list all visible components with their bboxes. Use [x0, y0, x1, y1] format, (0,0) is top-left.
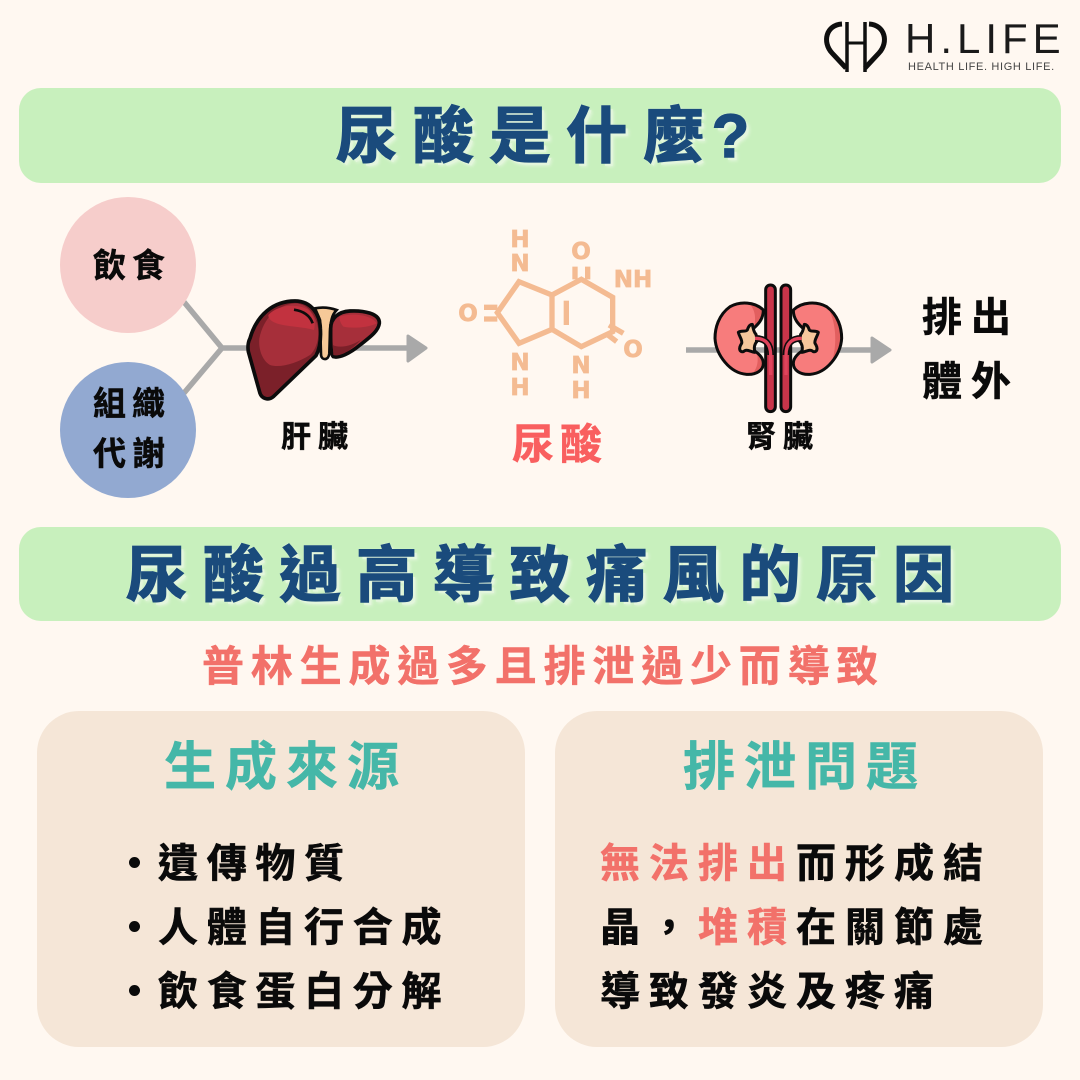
excreted from body text: 排出 體外 — [922, 296, 1020, 404]
circle: tissue metabolism — [60, 362, 196, 498]
panel heading: 排泄問題 — [683, 739, 927, 797]
molecule atom labels: N — [571, 353, 591, 379]
heading text: 尿酸是什麼? — [336, 102, 765, 170]
bullet 3 — [129, 985, 140, 996]
logo wordmark: H.LIFE — [905, 15, 1066, 62]
bullet list — [129, 842, 450, 1014]
bullet 2 — [129, 921, 140, 932]
molecule atom labels: N — [510, 350, 530, 376]
item: body synthesis: 人體自行合成 — [158, 906, 450, 950]
molecule atom labels: H — [510, 375, 530, 401]
explanation text — [600, 842, 992, 1014]
molecule atom labels: H — [510, 227, 530, 253]
molecule atom labels: H — [571, 378, 591, 404]
kidney label: 腎臟 — [746, 421, 820, 454]
molecule atom labels: O — [571, 239, 591, 265]
subtitle: 普林生成過多且排泄過少而導致 — [202, 643, 885, 690]
bullet 1 — [129, 857, 140, 868]
item: genetic material: 遺傳物質 — [158, 842, 353, 886]
heading text: 尿酸過高導致痛風的原因 — [126, 541, 970, 609]
panel: production sources — [37, 711, 525, 1047]
diet label: 飲食 — [93, 247, 171, 284]
logo: H.LIFE — [824, 15, 1066, 73]
logo tagline: HEALTH LIFE. HIGH LIFE. — [908, 61, 1055, 73]
item: dietary protein breakdown: 飲食蛋白分解 — [158, 970, 450, 1014]
uric acid label: 尿酸 — [512, 421, 608, 468]
logo icon: heart with H — [824, 22, 887, 72]
panel: excretion problems — [555, 711, 1043, 1047]
heading bar: causes of gout — [19, 527, 1061, 621]
tissue metabolism label: 組織 代謝 — [93, 385, 171, 472]
line 3: 導致發炎及疼痛 — [600, 970, 943, 1014]
line 2: 晶，堆積在關節處 — [600, 906, 992, 950]
molecule atom labels: NH — [614, 267, 652, 293]
line 1: 無法排出而形成結 — [600, 842, 992, 886]
liver label: 肝臟 — [281, 421, 355, 454]
molecule atom labels: N — [510, 251, 530, 277]
molecule atom labels: O — [458, 301, 478, 327]
heading bar: what is uric acid — [19, 88, 1061, 183]
molecule atom labels: O — [623, 337, 643, 363]
circle: diet — [60, 197, 196, 333]
panel heading: 生成來源 — [164, 739, 408, 797]
